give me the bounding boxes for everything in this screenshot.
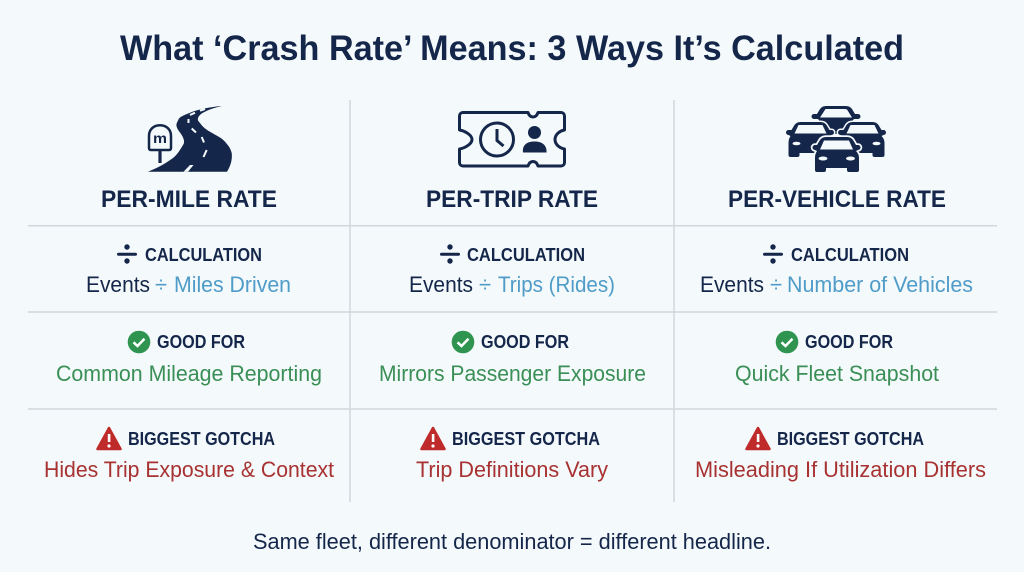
formula: Miles Driven (174, 272, 291, 297)
icon: warning triangle (422, 428, 444, 449)
car: back left (786, 122, 834, 157)
drawback: Hides Trip Exposure & Context (44, 457, 334, 482)
panel: per-mile rate (44, 106, 334, 482)
icon: winding road with mile marker: m (153, 130, 167, 146)
formula: Events (409, 272, 473, 297)
icon: four cars (786, 106, 886, 172)
icon: divide (440, 244, 460, 264)
icon: ticket with clock and person (460, 112, 564, 166)
benefit: Quick Fleet Snapshot (735, 361, 939, 386)
gotcha block (44, 428, 334, 482)
good for block (56, 331, 322, 386)
formula: Trips (Rides) (498, 272, 615, 297)
good for block (379, 331, 646, 386)
label: good for: GOOD FOR (481, 332, 569, 352)
gotcha block (695, 428, 986, 482)
footer note: Same fleet, different denominator = different headline. (253, 529, 771, 554)
label: calculation: CALCULATION (791, 245, 909, 265)
formula: ÷ (770, 272, 782, 297)
car: front (812, 137, 860, 172)
formula: Number of Vehicles (787, 272, 973, 297)
heading: per-trip rate: PER-TRIP RATE (426, 186, 598, 213)
label: biggest gotcha: BIGGEST GOTCHA (777, 429, 924, 449)
drawback: Misleading If Utilization Differs (695, 457, 986, 482)
formula: Events (700, 272, 764, 297)
icon: green check (776, 331, 798, 353)
gotcha block (416, 428, 608, 482)
heading: per-mile rate: PER-MILE RATE (101, 186, 277, 213)
car: top (812, 106, 860, 134)
label: good for: GOOD FOR (805, 332, 893, 352)
car: back right (838, 122, 886, 157)
benefit: Mirrors Passenger Exposure (379, 361, 646, 386)
drawback: Trip Definitions Vary (416, 457, 608, 482)
formula: ÷ (155, 272, 167, 297)
icon: green check (452, 331, 474, 353)
panel: per-trip rate (379, 112, 646, 482)
benefit: Common Mileage Reporting (56, 361, 322, 386)
calculation block (409, 244, 615, 297)
icon: warning triangle (746, 428, 770, 449)
calculation block (700, 244, 973, 297)
calculation block (86, 244, 291, 297)
label: biggest gotcha: BIGGEST GOTCHA (452, 429, 600, 449)
icon: green check (128, 331, 150, 353)
icon: divide (117, 244, 137, 264)
good for block (735, 331, 939, 386)
label: calculation: CALCULATION (145, 245, 262, 265)
label: biggest gotcha: BIGGEST GOTCHA (128, 429, 275, 449)
title: What ‘Crash Rate’ Means: 3 Ways It’s Calculated (120, 29, 904, 68)
icon: divide (763, 244, 783, 264)
panel: per-vehicle rate (695, 106, 986, 482)
heading: per-vehicle rate: PER-VEHICLE RATE (728, 186, 946, 213)
icon: warning triangle (98, 428, 120, 449)
label: good for: GOOD FOR (157, 332, 245, 352)
icon: winding road with mile marker (148, 106, 232, 172)
label: calculation: CALCULATION (467, 245, 585, 265)
formula: Events (86, 272, 150, 297)
formula: ÷ (479, 272, 491, 297)
